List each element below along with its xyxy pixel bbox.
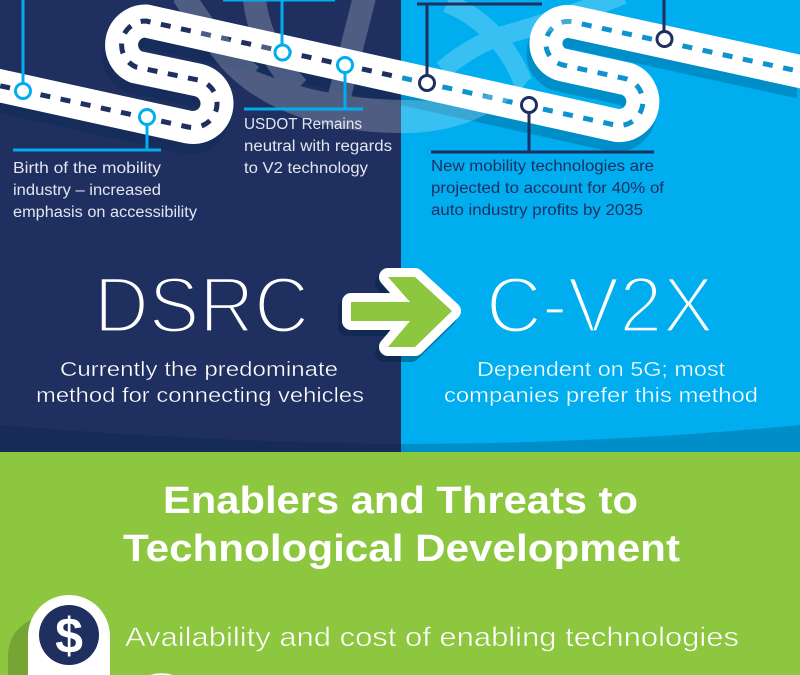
connector: upper timeline marker, left xyxy=(223,0,335,60)
icon: dollar badge xyxy=(8,595,110,675)
text: DSRC description: method for connecting vehicles xyxy=(36,384,364,407)
arrow: DSRC to C-V2X xyxy=(347,277,452,353)
text: birth of the mobility industry: emphasis on accessibility xyxy=(13,204,197,221)
text: C-V2X description xyxy=(444,358,758,407)
connector: upper timeline marker, far right xyxy=(657,0,672,46)
heading: C-V2X: C-V2X xyxy=(486,260,714,349)
panel: enablers and threats green background xyxy=(0,452,800,675)
text: DSRC description: Currently the predominate xyxy=(60,358,338,381)
panel: DSRC navy background xyxy=(0,0,401,452)
heading: DSRC: DSRC xyxy=(94,260,309,349)
road shadow xyxy=(401,38,797,150)
heading: enablers and threats xyxy=(123,480,680,570)
text: USDOT remains neutral: neutral with regards xyxy=(244,138,392,155)
text: new mobility technologies projection xyxy=(431,158,665,219)
text: C-V2X description: companies prefer this method xyxy=(444,384,758,407)
text: DSRC description xyxy=(36,358,364,407)
text: birth of the mobility industry: industry – increased xyxy=(13,182,161,199)
text: USDOT remains neutral: USDOT Remains xyxy=(244,116,362,133)
background emblem: faint globe bands xyxy=(183,0,623,133)
connector: new mobility technologies marker xyxy=(431,98,654,152)
text: new mobility technologies projection: auto industry profits by 2035 xyxy=(431,202,643,219)
icon: dollar badge: $ xyxy=(55,608,83,664)
text: USDOT remains neutral xyxy=(244,116,392,177)
connector: USDOT marker xyxy=(244,58,363,109)
heading: enablers and threats: Enablers and Threats to xyxy=(163,480,638,522)
text: new mobility technologies projection: New mobility technologies are xyxy=(431,158,654,175)
connector: birth of mobility label line xyxy=(13,110,161,150)
connector: upper timeline marker, center right xyxy=(417,4,542,90)
text: C-V2X description: Dependent on 5G; most xyxy=(477,358,725,381)
icon: next badge, cropped xyxy=(150,673,173,675)
panel: C-V2X blue background xyxy=(401,0,800,452)
text: USDOT remains neutral: to V2 technology xyxy=(244,160,368,177)
text: birth of the mobility industry: Birth of the mobility xyxy=(13,160,161,177)
road with lane dashes xyxy=(0,21,800,128)
text: new mobility technologies projection: projected to account for 40% of xyxy=(431,180,665,197)
heading: enablers and threats: Technological Development xyxy=(123,528,680,570)
text: availability and cost: Availability and cost of enabling technologies xyxy=(125,622,739,652)
connector: birth of mobility, top left xyxy=(16,0,30,98)
panel shadow: bottom curve xyxy=(0,425,800,452)
text: birth of the mobility industry xyxy=(13,160,197,221)
